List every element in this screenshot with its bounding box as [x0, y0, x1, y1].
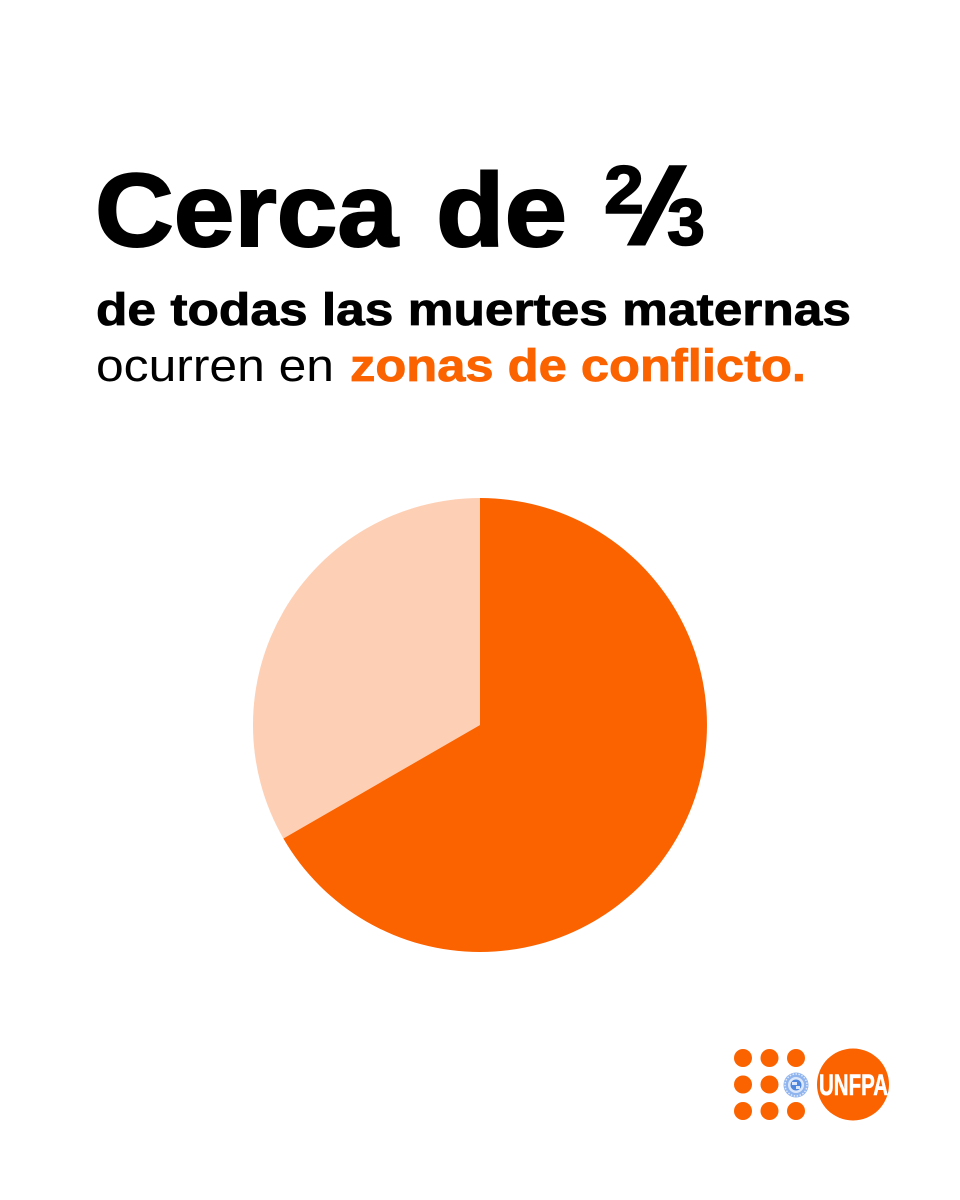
subtitle line 2	[96, 340, 806, 391]
subtitle plain text: ocurren en	[96, 340, 334, 391]
logo wordmark: UNFPA	[819, 1069, 888, 1102]
icon: UN emblem	[784, 1072, 808, 1098]
title fraction: two thirds: /	[628, 146, 686, 267]
subtitle line 1: de todas las muertes maternas	[96, 284, 851, 335]
logo: UNFPA	[734, 1048, 889, 1120]
pie slice: remaining third	[253, 498, 480, 838]
title	[95, 146, 705, 269]
title fraction: two thirds: 2	[604, 152, 644, 228]
title fraction: two thirds	[604, 146, 705, 267]
pie slice: two thirds	[283, 498, 707, 952]
title word: Cerca: Cerca	[95, 153, 399, 269]
logo circle	[817, 1048, 889, 1120]
logo dots	[734, 1049, 805, 1120]
title word: de: de	[436, 153, 567, 269]
title fraction: two thirds: 3	[667, 185, 705, 259]
subtitle highlight: zonas de conflicto.	[350, 340, 806, 391]
pie chart: two thirds	[253, 498, 707, 952]
